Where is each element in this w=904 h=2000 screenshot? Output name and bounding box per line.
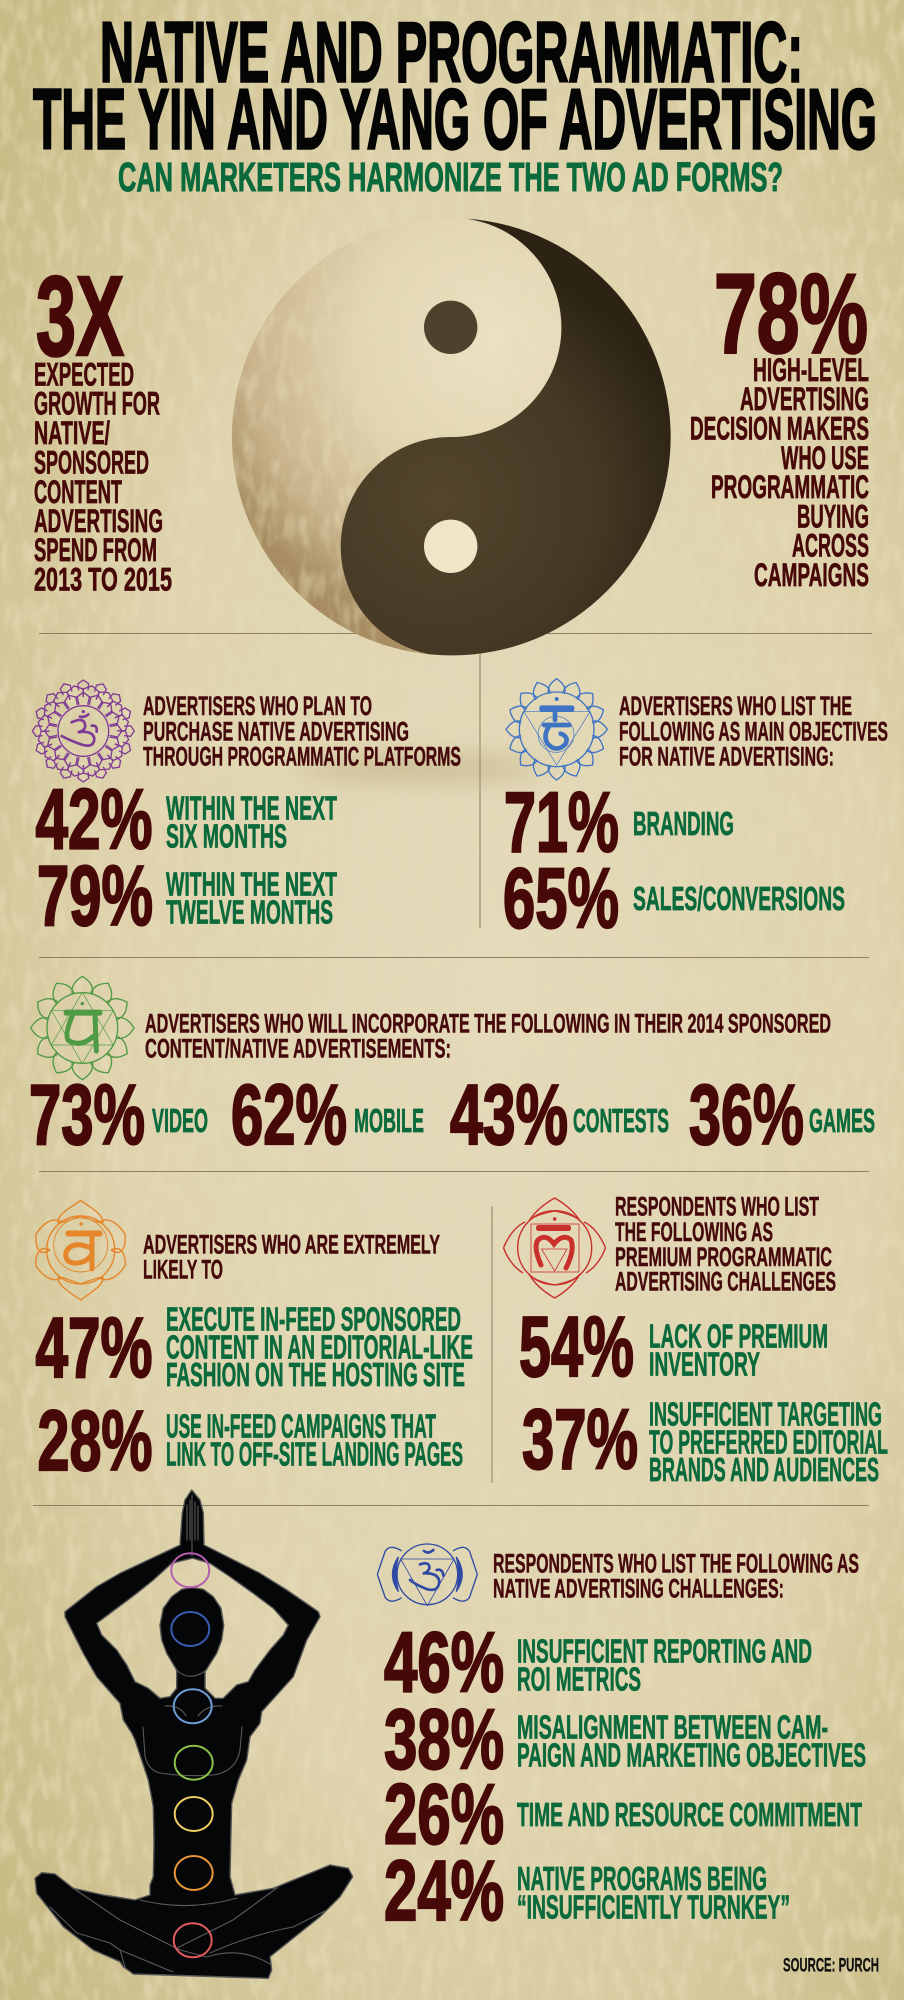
stat: 3X growth: SPEND FROM <box>34 532 157 568</box>
stat: 46% <box>384 1616 812 1710</box>
heading <box>619 691 888 772</box>
stat: 3X growth: 2013 TO 2015 <box>34 562 172 598</box>
stat: 62% mobile: MOBILE <box>354 1103 424 1140</box>
title <box>33 6 877 168</box>
stat: 47%: EXECUTE IN-FEED SPONSORED <box>166 1302 461 1339</box>
panel: native challenges <box>377 1544 866 1939</box>
heading: CONTENT/NATIVE ADVERTISEMENTS: <box>145 1034 451 1064</box>
stat: 37%: 37% <box>522 1392 638 1488</box>
stat: 28%: 28% <box>38 1394 152 1489</box>
stat: 38% <box>384 1692 866 1788</box>
stat: 54%: 54% <box>519 1300 634 1395</box>
stat: 79%: 79% <box>37 849 153 944</box>
panel: extremely likely <box>36 1200 473 1489</box>
stat: 3X growth: CONTENT <box>34 474 122 510</box>
stat: 42%: SIX MONTHS <box>166 818 287 856</box>
icon: orange sacral chakra <box>36 1200 125 1300</box>
stat: 3X growth: NATIVE/ <box>34 415 110 451</box>
panel: main objectives <box>503 679 888 946</box>
heading: PURCHASE NATIVE ADVERTISING <box>143 716 409 746</box>
figure: meditating silhouette with chakras <box>35 1490 353 1978</box>
stat: 38%: 38% <box>384 1692 504 1788</box>
stat: 42% <box>36 772 337 868</box>
stat: 47%: 47% <box>36 1301 152 1396</box>
stat: 3X growth <box>34 253 172 598</box>
stat: 73% video: 73% <box>29 1068 145 1163</box>
stat: 71%: BRANDING <box>633 806 734 843</box>
stat: 24%: 24% <box>384 1844 504 1939</box>
stat: 43% contests: 43% <box>450 1068 568 1163</box>
heading <box>493 1549 859 1604</box>
stat: 3X growth: GROWTH FOR <box>34 386 160 422</box>
panel: 2014 sponsored content <box>29 976 875 1163</box>
stat: 28% <box>38 1394 463 1489</box>
stat: 73% video: VIDEO <box>152 1103 208 1140</box>
stat: 26% <box>384 1768 862 1862</box>
heading <box>615 1192 836 1297</box>
icon: blue third-eye chakra <box>377 1544 477 1606</box>
heading: ADVERTISERS WHO PLAN TO <box>143 691 372 721</box>
heading: THROUGH PROGRAMMATIC PLATFORMS <box>143 742 461 772</box>
stat: 54% <box>519 1300 828 1395</box>
stat: 62% mobile: 62% <box>231 1068 347 1163</box>
stat: 78% decision makers <box>690 250 869 593</box>
stat: 28%: LINK TO OFF-SITE LANDING PAGES <box>166 1436 463 1473</box>
stat: 26%: 26% <box>384 1768 504 1862</box>
heading: LIKELY TO <box>143 1255 223 1285</box>
stat: 47%: FASHION ON THE HOSTING SITE <box>166 1357 465 1394</box>
icon: blue throat chakra <box>506 679 607 780</box>
panel: programmatic challenges <box>504 1192 888 1489</box>
stat: 79% <box>37 849 337 944</box>
stat: 79%: WITHIN THE NEXT <box>166 866 337 904</box>
stat: 42%: 42% <box>36 772 152 868</box>
heading <box>145 1009 831 1064</box>
stat: 3X growth: 3X <box>36 253 124 379</box>
stat: 47%: CONTENT IN AN EDITORIAL-LIKE <box>166 1329 473 1366</box>
stat: 46%: ROI METRICS <box>517 1661 641 1698</box>
stat: 42%: WITHIN THE NEXT <box>166 790 337 828</box>
stat: 47% <box>36 1301 473 1396</box>
stat: 79%: TWELVE MONTHS <box>166 894 333 931</box>
panel: plan to purchase native <box>32 680 461 944</box>
stat: 3X growth: EXPECTED <box>34 356 134 392</box>
heading <box>143 691 461 772</box>
chakra rings <box>171 1553 213 1957</box>
stat: 46%: 46% <box>384 1616 504 1710</box>
icon: red root chakra <box>504 1198 606 1298</box>
stat: 65%: 65% <box>503 852 619 946</box>
heading <box>143 1229 440 1285</box>
yin yang symbol <box>230 216 672 658</box>
icon: green heart chakra <box>31 976 134 1080</box>
stat: 37% <box>522 1392 888 1489</box>
stat: 3X growth: ADVERTISING <box>34 503 163 539</box>
stat: 24% <box>384 1844 790 1939</box>
stat: 36% games: 36% <box>689 1068 804 1163</box>
stat: 65% <box>503 852 845 946</box>
heading: ADVERTISERS WHO ARE EXTREMELY <box>143 1229 440 1259</box>
heading: THE FOLLOWING AS <box>615 1217 773 1247</box>
stat: 28%: USE IN-FEED CAMPAIGNS THAT <box>166 1409 436 1446</box>
stat: 54%: INVENTORY <box>649 1347 760 1384</box>
stat: 43% contests: CONTESTS <box>573 1103 669 1140</box>
icon: purple crown chakra <box>32 680 134 782</box>
stat: 3X growth: SPONSORED <box>34 444 149 480</box>
stat: 71%: 71% <box>504 776 619 870</box>
